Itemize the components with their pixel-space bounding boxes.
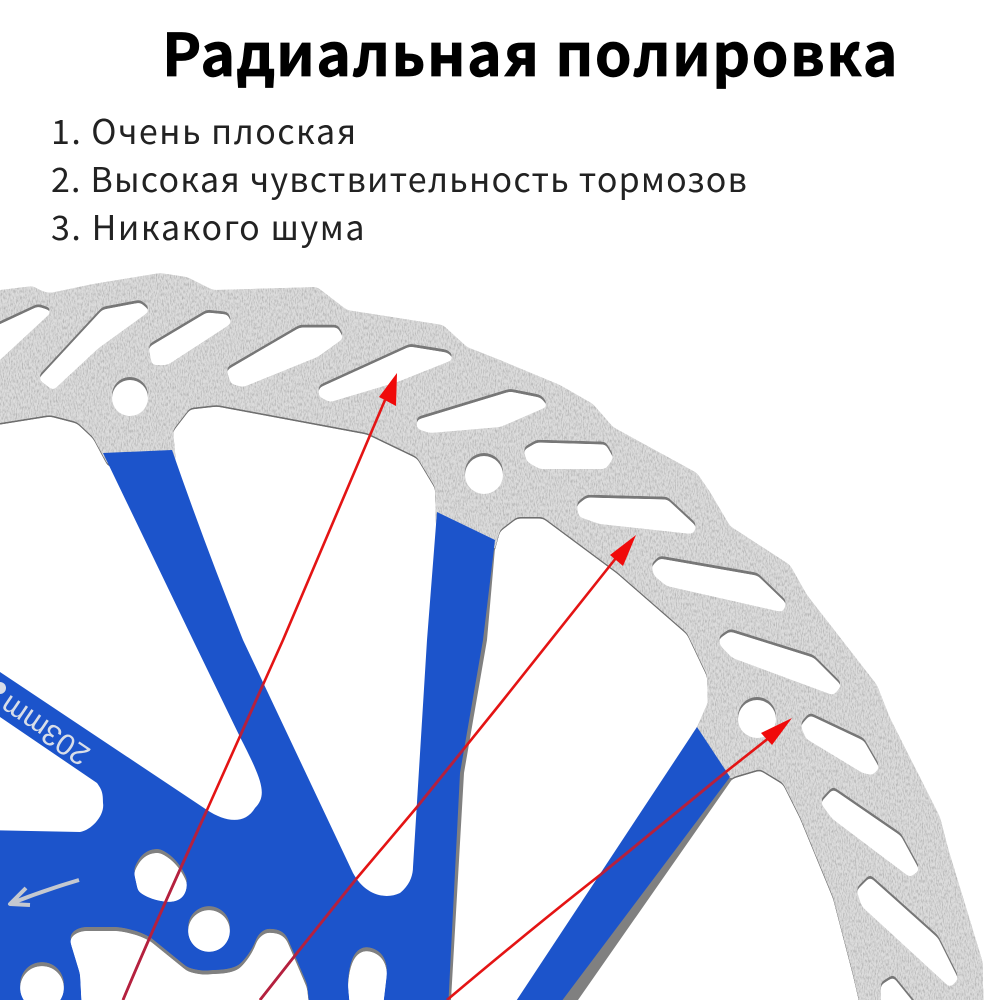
feature list: 3. Никакого шума [51, 201, 366, 250]
hub cut-out shadow [70, 927, 312, 1000]
feature list [51, 105, 748, 250]
rim mounting holes [112, 380, 776, 738]
engraved logo mark [0, 682, 6, 694]
brake disc rotor [0, 273, 985, 1000]
engraved rotation arrow [10, 880, 79, 905]
title: Радиальная полировка [162, 8, 899, 93]
ventilation slots [0, 304, 957, 1000]
red arrow to mounting hole area [447, 718, 792, 1000]
hub holes [20, 853, 387, 1000]
feature list: 2. Высокая чувствительность тормозов [51, 153, 748, 202]
slot shadows [0, 301, 957, 1000]
red arrow to slot [123, 373, 397, 1000]
hub cut-out [70, 931, 312, 1000]
silver brake ring [0, 273, 985, 1000]
red arrow to rim [260, 535, 636, 1000]
blue spoke edge shadow [444, 548, 733, 1000]
rim hole shadows [112, 377, 776, 735]
feature list: 1. Очень плоская [51, 105, 358, 154]
hub hole shadows [20, 849, 387, 1000]
blue spoke lower right [497, 727, 730, 1000]
blue spokes and hub [0, 450, 495, 1000]
ring edge shadow [0, 275, 985, 1000]
